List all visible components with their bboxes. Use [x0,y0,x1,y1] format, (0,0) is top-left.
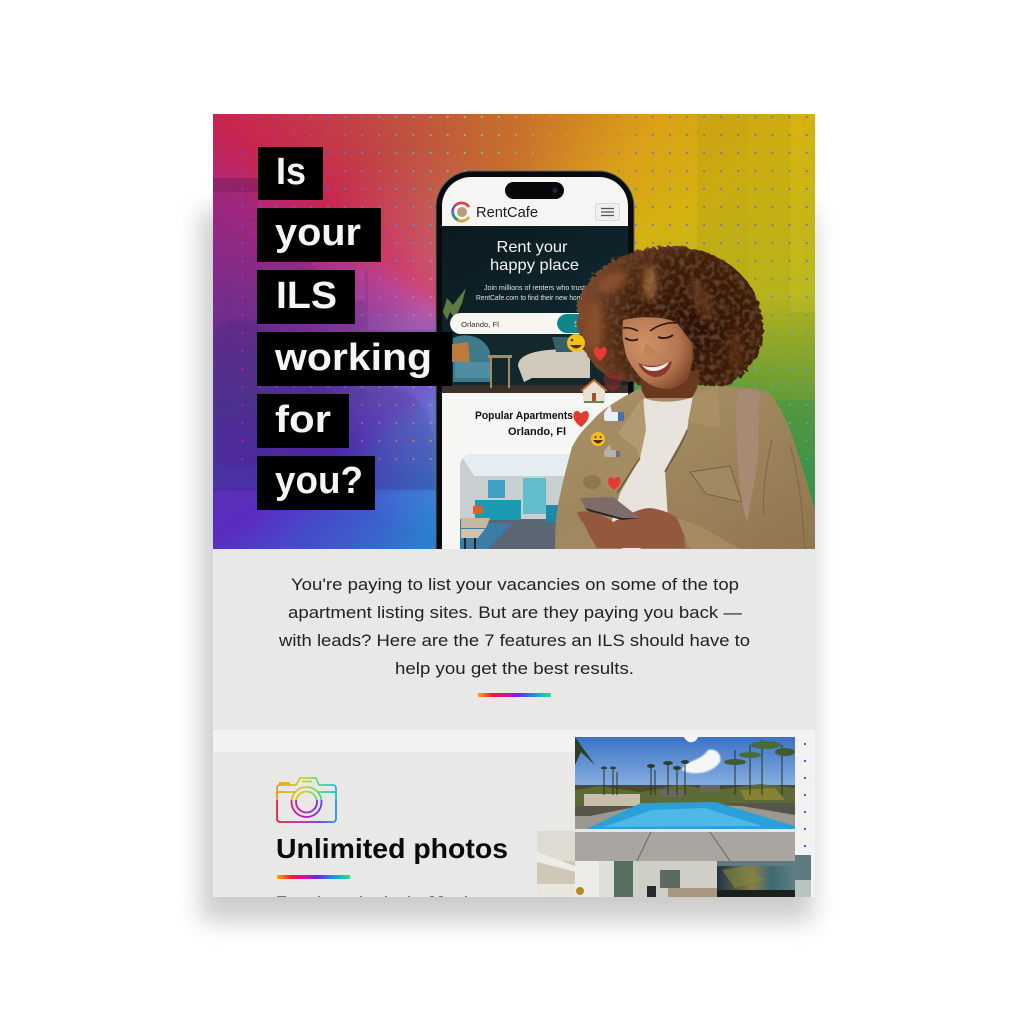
phone body [436,171,634,550]
phone mockup [436,171,634,553]
clipped body text tops [277,896,467,897]
hair [578,247,763,387]
headline line: Is: Is [276,151,306,193]
RentCafe logo [453,203,538,221]
menu button [596,204,620,220]
headline line: Is [258,147,323,200]
panel: introduction [213,549,815,730]
concrete [575,829,795,832]
intro text [278,575,750,678]
headline line: you?: you? [275,460,363,502]
headline line: your: your [275,212,361,254]
intro text: help you get the best results. [395,659,634,678]
headline line: working [257,332,452,386]
hero gradient background [213,114,815,550]
apartment listing heading [476,411,582,437]
woman with smartphone [555,247,815,549]
emoji: smileys [567,334,605,446]
rainbow divider [478,693,551,697]
section heading: Unlimited photos [276,833,508,864]
hero background city photo overlay [213,114,815,490]
clouds [682,750,720,773]
headline line: for: for [275,399,331,441]
room scene [442,288,628,393]
phone hero headline: happy place [490,257,579,274]
apartment photo [460,454,570,549]
face [622,317,693,389]
intro text: with leads? Here are the 7 features an ILS should have to [278,631,750,650]
emoji: house [581,380,607,403]
headline line: you? [257,456,375,510]
white t-shirt [612,397,693,549]
RentCafe logo: RentCafe [476,205,538,221]
intro text: apartment listing sites. But are they paying you back — [288,603,742,622]
panel: unlimited photos [213,730,815,897]
headline [257,147,452,510]
phone screen [442,177,628,553]
apartment listing heading: Orlando, Fl [508,426,566,438]
sleeve cuff [677,518,740,549]
icon: camera [277,778,336,822]
search bar: Orlando, Fl [461,320,499,329]
emoji: hearts [573,347,621,490]
palm trees [604,740,782,795]
intro text: You're paying to list your vacancies on some of the top [291,575,739,594]
side dots [804,743,806,847]
deck [575,806,795,829]
headline line: your [257,208,381,262]
tree line and buildings [575,785,795,792]
phone hero subtext: Join millions of renters who trust [484,285,585,292]
photo: interiors collage [537,831,811,897]
apartment listing heading: Popular Apartments in [475,410,585,422]
dynamic island [505,182,564,199]
hands [577,508,685,548]
rainbow divider [277,875,350,879]
headline line: for [257,394,349,448]
headline line: ILS: ILS [276,275,337,317]
page drop shadow [201,210,813,921]
search bar: S [574,320,579,329]
emoji: thumbs up [604,405,624,457]
phone hero headline: Rent your [496,239,568,256]
phone hero headline [490,239,579,274]
hand held phone [580,497,640,520]
phone hero subtext: RentCafe.com to find their new home [476,295,586,302]
neck [640,370,700,398]
headline line: ILS [257,270,355,324]
jacket collar and details [583,386,805,549]
phone hero subtext [476,284,585,300]
pool water [586,802,795,830]
backpack strap [736,389,760,523]
jacket [555,386,815,549]
emoji: faded heart [603,373,623,392]
hero panel on screen [442,226,628,335]
photo: resort pool [575,737,795,861]
headline line: working: working [274,337,432,379]
hero dot grid [234,108,815,466]
search bar [450,313,580,334]
